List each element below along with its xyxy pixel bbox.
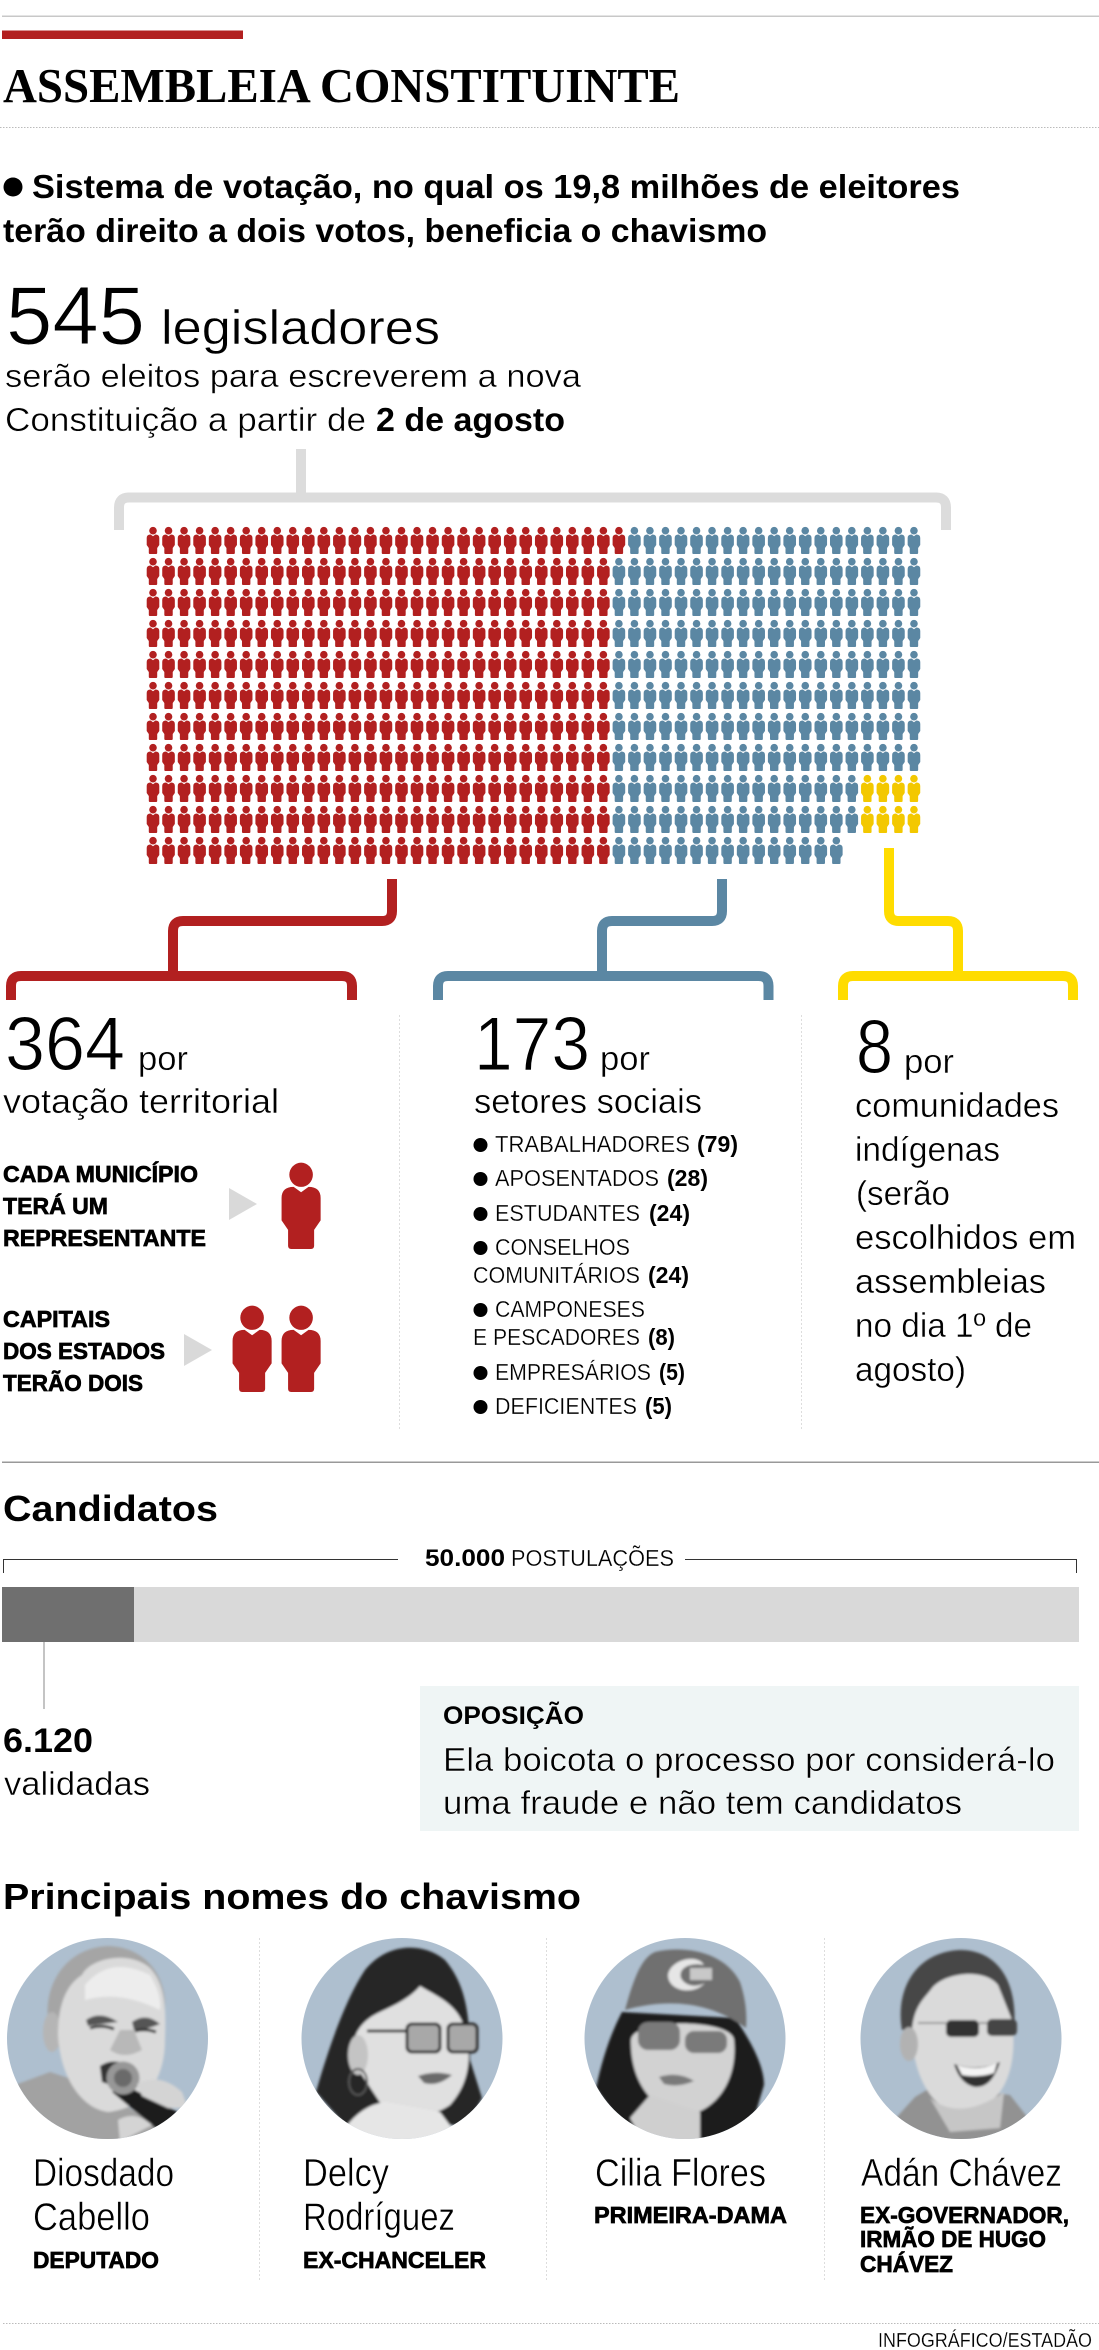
list of sectors: (8) xyxy=(648,1324,675,1350)
label: Adán Chávez: IRMÃO DE HUGO xyxy=(860,2225,1046,2252)
label: Adán Chávez: CHÁVEZ xyxy=(860,2250,953,2277)
list of sectors xyxy=(473,1131,738,1419)
callout: validated count: 6.120 xyxy=(3,1722,93,1760)
label: Diosdado Cabello: DEPUTADO xyxy=(33,2247,159,2273)
column: 364 territorial: votação territorial xyxy=(3,1083,279,1121)
rule: two representatives for state capitals xyxy=(3,1306,321,1396)
column: 8 indigenous communities: indígenas xyxy=(855,1131,1000,1169)
list of sectors: E PESCADORES xyxy=(473,1324,640,1350)
headline figure: 545 legisladores xyxy=(5,269,581,438)
yellow figures: indigenous seats xyxy=(861,775,920,833)
callout: validated count xyxy=(3,1722,150,1802)
validated share xyxy=(2,1587,134,1642)
scale bracket with label: POSTULAÇÕES xyxy=(511,1544,674,1571)
portrait: Adán Chávez xyxy=(860,1938,1062,2145)
rule: one representative per municipality: CADA MUNICÍPIO xyxy=(3,1160,198,1187)
label: Diosdado Cabello: Diosdado xyxy=(33,2152,174,2195)
column: 173 social sectors xyxy=(473,1002,738,1419)
list of sectors: EMPRESÁRIOS xyxy=(495,1359,651,1385)
heading: main names: Principais nomes do chavismo xyxy=(3,1876,581,1917)
callout: validated count: validadas xyxy=(4,1765,150,1802)
list of sectors: CAMPONESES xyxy=(495,1296,645,1322)
portrait: Delcy Rodríguez xyxy=(301,1938,503,2145)
number 173: 173 xyxy=(474,1002,590,1087)
rule: one representative per municipality xyxy=(3,1160,321,1251)
panel: opposition: OPOSIÇÃO xyxy=(443,1700,584,1730)
number 8: 8 xyxy=(856,1005,893,1090)
label: Delcy Rodríguez: Rodríguez xyxy=(303,2196,455,2239)
list of sectors: CONSELHOS xyxy=(495,1234,630,1260)
label: Adán Chávez: Adán Chávez xyxy=(861,2152,1062,2195)
column: 8 indigenous communities: por xyxy=(904,1043,954,1081)
list of sectors: DEFICIENTES xyxy=(495,1393,637,1419)
red connector xyxy=(11,879,392,1000)
label: Adán Chávez: EX-GOVERNADOR, xyxy=(860,2202,1069,2228)
rule: two representatives for state capitals: CAPITAIS xyxy=(3,1306,110,1332)
panel: opposition xyxy=(420,1686,1079,1831)
list of sectors: APOSENTADOS xyxy=(495,1165,659,1191)
headline figure: 545 legisladores: 2 de agosto xyxy=(376,401,565,438)
column: 8 indigenous communities: escolhidos em xyxy=(855,1219,1076,1257)
list of sectors: (24) xyxy=(649,1200,690,1226)
list of sectors: (24) xyxy=(648,1262,689,1288)
intro text xyxy=(3,168,960,249)
list of sectors: (5) xyxy=(645,1393,672,1419)
portrait: Diosdado Cabello xyxy=(7,1938,208,2145)
pictogram: 545 legislators xyxy=(147,527,920,864)
panel: opposition: Ela boicota o processo por considerá-lo xyxy=(443,1741,1055,1778)
headline figure: 545 legisladores: legisladores xyxy=(161,302,440,355)
label: Cilia Flores: Cilia Flores xyxy=(595,2152,766,2195)
headline figure: 545 legisladores: 545 xyxy=(6,269,145,362)
list of sectors: COMUNITÁRIOS xyxy=(473,1262,640,1288)
label: Adán Chávez xyxy=(860,2152,1069,2277)
portrait: Cilia Flores xyxy=(584,1938,786,2145)
column: 8 indigenous communities: comunidades xyxy=(855,1087,1059,1125)
heading: candidatos: Candidatos xyxy=(3,1488,218,1529)
rule: one representative per municipality: TERÁ UM xyxy=(3,1192,108,1219)
rule: two representatives for state capitals: TERÃO DOIS xyxy=(3,1369,143,1396)
list of sectors: (28) xyxy=(667,1165,708,1191)
label: Delcy Rodríguez xyxy=(303,2152,486,2273)
column: 173 social sectors: por xyxy=(600,1040,650,1078)
column: 8 indigenous communities: no dia 1º de xyxy=(855,1307,1032,1345)
label: Diosdado Cabello: Cabello xyxy=(33,2196,150,2239)
list of sectors: TRABALHADORES xyxy=(495,1131,690,1157)
column: 8 indigenous communities: assembleias xyxy=(855,1263,1046,1301)
yellow connector xyxy=(843,848,1073,1000)
grey bracket xyxy=(119,449,946,530)
column: 364 territorial: por xyxy=(138,1040,188,1078)
number 364: 364 xyxy=(5,1002,125,1087)
blue connector xyxy=(438,879,768,1000)
red accent bar xyxy=(2,30,243,39)
list of sectors: ESTUDANTES xyxy=(495,1200,640,1226)
rule: one representative per municipality: REPRESENTANTE xyxy=(3,1225,206,1251)
label: Cilia Flores xyxy=(594,2152,787,2228)
column: 364 territorial xyxy=(3,1002,321,1396)
red figures: territorial seats xyxy=(147,527,625,864)
column: 173 social sectors: setores sociais xyxy=(474,1083,702,1121)
rule: two representatives for state capitals: DOS ESTADOS xyxy=(3,1338,165,1364)
label: Cilia Flores: PRIMEIRA-DAMA xyxy=(594,2202,787,2228)
title: ASSEMBLEIA CONSTITUINTE xyxy=(3,58,680,113)
label: Delcy Rodríguez: Delcy xyxy=(303,2152,389,2195)
label: Diosdado Cabello xyxy=(33,2152,174,2273)
list of sectors: (5) xyxy=(659,1359,685,1385)
column: 8 indigenous communities: agosto) xyxy=(855,1351,966,1389)
column: 8 indigenous communities: (serão xyxy=(856,1175,950,1213)
scale bracket with label xyxy=(4,1544,1076,1573)
column: 8 indigenous communities xyxy=(855,1005,1076,1389)
label: Delcy Rodríguez: EX-CHANCELER xyxy=(303,2247,486,2273)
panel: opposition: uma fraude e não tem candidatos xyxy=(443,1784,962,1821)
scale bracket with label: 50.000 xyxy=(425,1545,505,1572)
headline figure: 545 legisladores: serão eleitos para escreverem a nova xyxy=(5,358,581,394)
bar chart: candidates xyxy=(2,1544,1079,1709)
blue figures: social sector seats xyxy=(613,527,920,864)
intro text: Sistema de votação, no qual os 19,8 milhões de eleitores xyxy=(32,168,960,205)
intro text: terão direito a dois votos, beneficia o chavismo xyxy=(3,212,767,249)
headline figure: 545 legisladores: Constituição a partir de xyxy=(5,401,366,438)
list of sectors: (79) xyxy=(697,1131,738,1157)
